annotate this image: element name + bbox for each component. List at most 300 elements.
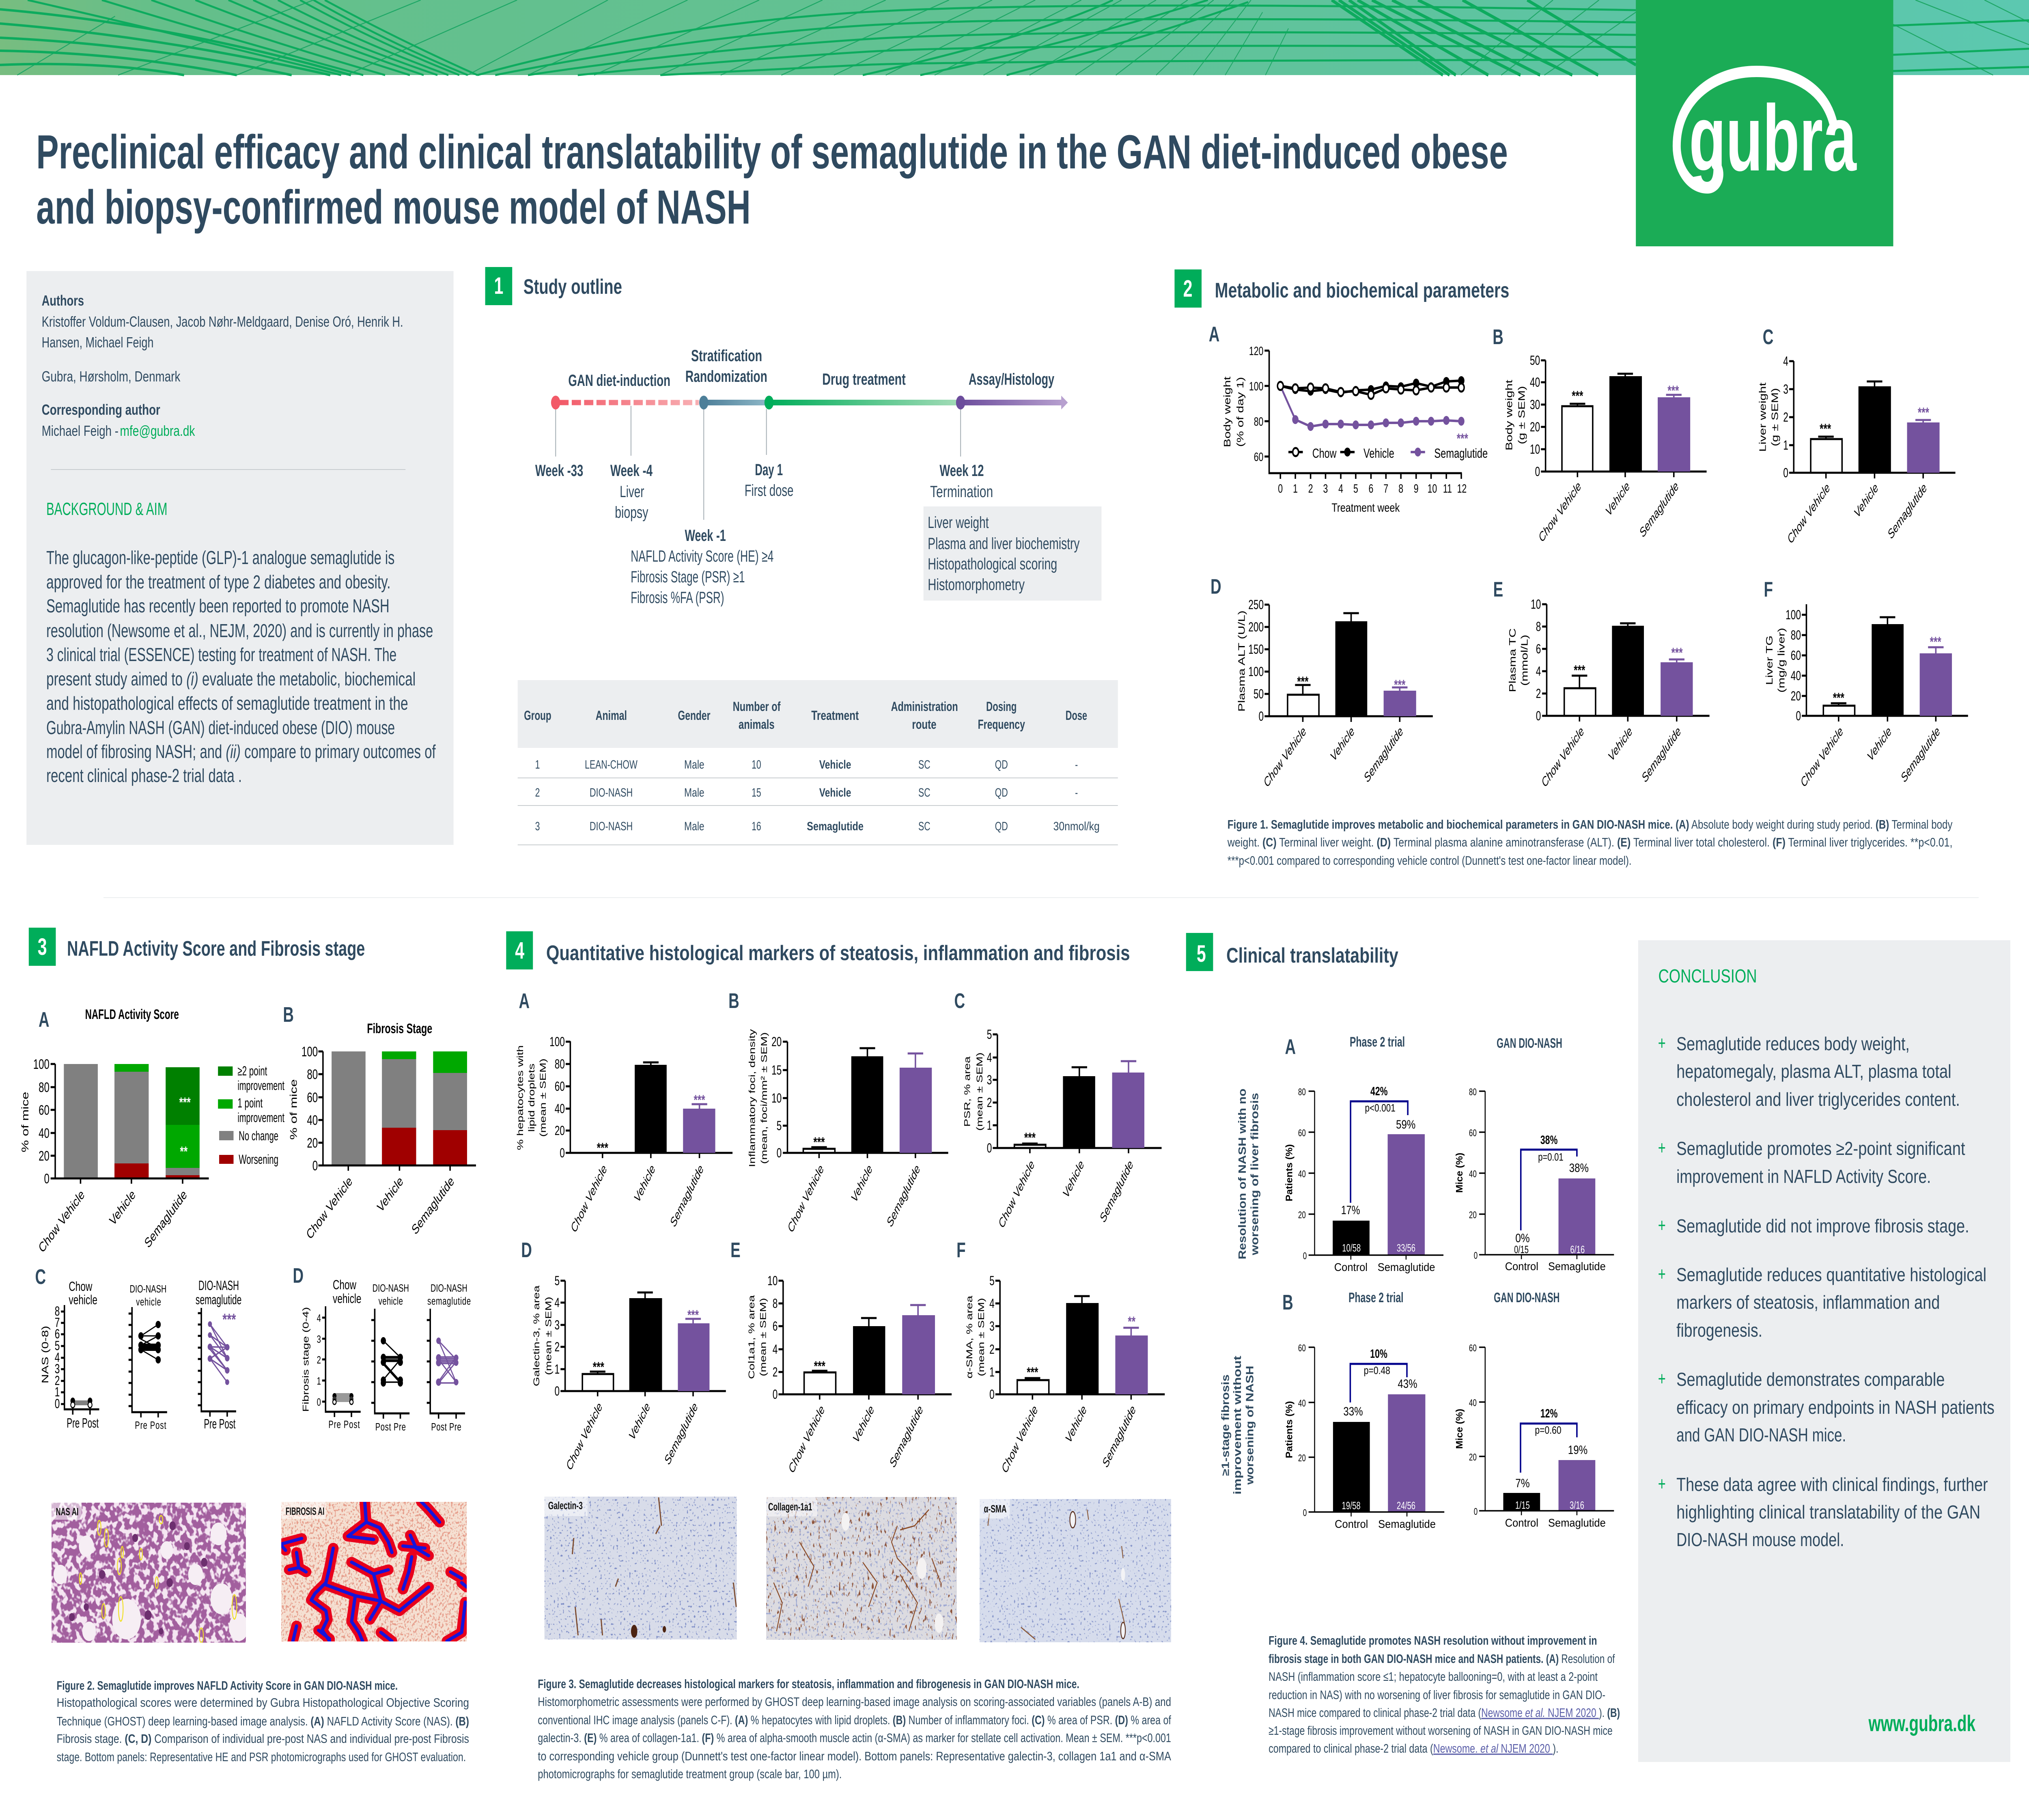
chart E: plasma TC bars: E: [1493, 577, 1503, 601]
chart C: liver weight bars: 1: [1783, 438, 1788, 452]
chart E: plasma TC bars: Semaglutide: [1639, 724, 1683, 785]
timeline: First dose: [745, 482, 793, 500]
chart A: NAFLD activity score stacked bars: NAFLD Activity Score: [85, 1007, 179, 1022]
badge 5: [1186, 933, 1213, 971]
conclusion bullets: +: [1658, 1264, 1666, 1284]
chart E: Col1a1: 6: [773, 1319, 778, 1333]
study design table: [518, 680, 1118, 845]
NAS DIO-NASH semaglutide: DIO-NASH: [198, 1278, 239, 1293]
fibrosis chow vehicle: Pre Post: [328, 1419, 360, 1430]
timeline: Week -4: [610, 462, 653, 480]
micrograph: fibrosis AI: [281, 1502, 467, 1641]
study design table: SC: [918, 819, 930, 833]
chart A left: phase 2 trial resolution: Patients (%): [1284, 1144, 1294, 1201]
NAS chow vehicle: 4: [55, 1350, 60, 1365]
figure 4 caption: ≥1-stage fibrosis improvement without worsening of NASH in GAN DIO-NASH mice: [1269, 1723, 1613, 1738]
badge 4: [506, 931, 533, 969]
chart F: liver TG bars: 0: [1796, 709, 1801, 723]
timeline: Termination: [930, 483, 993, 501]
chart E: plasma TC bars: Plasma TC: [1507, 628, 1518, 692]
figure 2 caption: Figure 2. Semaglutide improves NAFLD Activity Score in GAN DIO-NASH mice.: [57, 1678, 398, 1693]
chart C: paired NAS plots: [35, 1265, 241, 1432]
chart B: body weight bars: 20: [1530, 420, 1540, 434]
background paragraph: approved for the treatment of type 2 diabetes and obesity.: [46, 572, 390, 592]
assay list box: Liver weight: [928, 514, 989, 532]
chart A: hepatocytes with lipid droplets: 100: [549, 1034, 565, 1049]
chart D: plasma ALT bars: Vehicle: [1328, 724, 1357, 764]
chart B: inflammatory foci: 20: [771, 1034, 782, 1049]
chart E: Col1a1: 8: [773, 1296, 778, 1311]
chart D: plasma ALT bars: D: [1211, 575, 1221, 599]
authors block: Hansen, Michael Feigh: [42, 334, 153, 351]
chart B right: GAN DIO-NASH fibrosis: Semaglutide: [1548, 1517, 1606, 1529]
chart D: plasma ALT bars: 100: [1248, 664, 1264, 679]
chart A: NAFLD activity score stacked bars: A: [39, 1008, 50, 1032]
chart E: Col1a1: 0: [773, 1387, 778, 1402]
figure 4 caption: reduction in NAS) with no worsening of liver fibrosis for semaglutide in GAN DIO-: [1269, 1688, 1605, 1702]
study design table: -: [1075, 785, 1078, 799]
chart B: fibrosis stage stacked bars: 80: [307, 1067, 318, 1082]
chart A: hepatocytes with lipid droplets: ***: [597, 1140, 608, 1156]
micrograph: NAS AI: NAS AI: [56, 1506, 78, 1518]
chart B: fibrosis stage stacked bars: % of mice: [288, 1079, 299, 1140]
chart B left: phase 2 trial fibrosis: Semaglutide: [1378, 1518, 1436, 1531]
chart A: NAFLD activity score stacked bars: 40: [39, 1126, 50, 1141]
figure 2 caption: [57, 1678, 469, 1764]
badge 1: 1: [494, 273, 503, 299]
chart A: body weight over time: 8: [1398, 481, 1403, 495]
conclusion bullets: These data agree with clinical findings, further: [1676, 1475, 1988, 1495]
micrograph: NAS AI: [52, 1503, 248, 1643]
chart C: PSR area: PSR, % area: [962, 1056, 972, 1127]
authors block: [42, 293, 403, 439]
study design table: Semaglutide: [807, 819, 864, 833]
chart B right: GAN DIO-NASH fibrosis: 20: [1469, 1452, 1477, 1463]
chart A: body weight over time: 4: [1338, 481, 1343, 495]
fibrosis DIO-NASH vehicle: vehicle: [379, 1295, 403, 1307]
chart A: hepatocytes with lipid droplets: 60: [555, 1079, 565, 1094]
figure 2 caption: stage. Bottom panels: Representative HE and PSR photomicrographs used for GHOST evaluation.: [57, 1750, 466, 1764]
background paragraph: [46, 548, 436, 786]
chart B: body weight bars: 30: [1530, 397, 1540, 412]
figure 2 caption: Fibrosis stage. (C, D) Comparison of individual pre-post NAS and individual pre-post Fibrosis: [57, 1732, 469, 1746]
badge 2: 2: [1183, 276, 1192, 302]
figure 1 caption: [1227, 817, 1953, 868]
chart E: plasma TC bars: 2: [1536, 686, 1541, 701]
chart C: PSR area: 3: [987, 1073, 992, 1087]
chart A: body weight over time: 2: [1308, 481, 1313, 495]
chart C: liver weight bars: 2: [1783, 410, 1788, 424]
chart A: body weight over time: (% of day 1): [1235, 377, 1245, 447]
chart C: PSR area: Semaglutide: [1098, 1157, 1135, 1225]
timeline: Assay/Histology: [969, 370, 1055, 388]
chart D: galectin-3: ***: [593, 1359, 604, 1375]
legend: [218, 1064, 284, 1167]
fibrosis chow vehicle: 1: [317, 1375, 321, 1387]
chart C: liver weight bars: 0: [1783, 465, 1788, 480]
chart A right: GAN DIO-NASH resolution: 0%: [1515, 1231, 1530, 1245]
conclusion bullets: cholesterol and liver triglycerides content.: [1676, 1090, 1960, 1110]
study design table: LEAN-CHOW: [585, 757, 638, 771]
chart A: NAFLD activity score stacked bars: Chow Vehicle: [37, 1187, 87, 1256]
chart C: PSR area: ***: [1024, 1130, 1036, 1146]
section 3: NAFLD activity score and fibrosis stage: [20, 928, 476, 1764]
chart B: fibrosis stage stacked bars: Vehicle: [375, 1173, 405, 1215]
chart B: body weight bars: 10: [1530, 442, 1540, 457]
assay list box: Plasma and liver biochemistry: [928, 535, 1080, 553]
fibrosis chow vehicle: Chow: [333, 1277, 357, 1292]
conclusion bullets: +: [1658, 1138, 1666, 1158]
chart A left: phase 2 trial resolution: p<0.001: [1365, 1102, 1396, 1114]
conclusion bullets: and GAN DIO-NASH mice.: [1676, 1425, 1846, 1445]
chart B right: GAN DIO-NASH fibrosis: Control: [1505, 1517, 1538, 1529]
chart B left: phase 2 trial fibrosis: 24/56: [1397, 1500, 1415, 1512]
chart A: hepatocytes with lipid droplets: Chow Vehicle: [569, 1162, 609, 1235]
chart B: body weight bars: ***: [1572, 388, 1583, 404]
timeline: Week -1: [685, 527, 726, 545]
chart D: galectin-3: [521, 1238, 726, 1473]
study design table: Dosing: [986, 699, 1017, 714]
study design table: SC: [918, 757, 930, 771]
chart B: inflammatory foci: Semaglutide: [885, 1162, 922, 1230]
chart B left: phase 2 trial fibrosis: p=0.48: [1364, 1365, 1390, 1376]
chart A: body weight over time: 0: [1278, 481, 1283, 495]
chart C: PSR area: 1: [987, 1118, 992, 1133]
legend: Worsening: [239, 1152, 278, 1167]
NAS chow vehicle: vehicle: [69, 1292, 97, 1307]
background paragraph: Semaglutide has recently been reported to promote NASH: [46, 596, 390, 616]
chart D: galectin-3: D: [521, 1238, 532, 1262]
figure 3 caption: Figure 3. Semaglutide decreases histological markers for steatosis, inflammation and fibrogenesis in GAN DIO-NASH mice.: [538, 1677, 1079, 1691]
chart C: liver weight bars: (g ± SEM): [1770, 388, 1780, 446]
micrograph: collagen-1a1: Collagen-1a1: [768, 1501, 812, 1513]
timeline: Stratification: [691, 347, 762, 365]
chart D: plasma ALT bars: 150: [1248, 642, 1264, 657]
chart B: fibrosis stage stacked bars: 100: [302, 1044, 318, 1060]
study design table: Frequency: [978, 717, 1025, 732]
chart A right: GAN DIO-NASH resolution: 40: [1469, 1169, 1477, 1180]
figure 3 caption: galectin-3. (E) % area of collagen-1a1. (F) % area of alpha-smooth muscle actin (α-SMA) as marker for stellate cell activation. Mean ± SEM. ***p<0.001: [538, 1731, 1171, 1745]
chart A left: phase 2 trial resolution: 60: [1298, 1128, 1306, 1139]
assay list box: Histomorphometry: [928, 576, 1025, 594]
chart B left: phase 2 trial fibrosis: 0: [1303, 1508, 1307, 1518]
chart E: Col1a1: Vehicle: [851, 1402, 876, 1445]
chart D: paired fibrosis plots: [293, 1264, 471, 1433]
chart B: inflammatory foci: ***: [813, 1135, 825, 1150]
study design table: 15: [752, 785, 761, 799]
chart B: body weight bars: Body weight: [1504, 380, 1514, 450]
chart B: inflammatory foci: 15: [771, 1063, 782, 1077]
chart A right: GAN DIO-NASH resolution: p=0.01: [1538, 1151, 1564, 1163]
conclusion bullets: DIO-NASH mouse model.: [1676, 1530, 1844, 1550]
authors block: Authors: [42, 293, 84, 309]
timeline: Liver: [620, 483, 644, 501]
study design table: Animal: [596, 708, 627, 723]
chart B: body weight bars: (g ± SEM): [1516, 386, 1527, 444]
chart B right: GAN DIO-NASH fibrosis: 3/16: [1570, 1499, 1584, 1511]
chart A: body weight over time: A: [1209, 322, 1219, 346]
section 1: study outline: [485, 267, 1118, 845]
chart F: liver TG bars: Vehicle: [1865, 724, 1893, 764]
row label A: worsening of liver fibrosis: [1249, 1093, 1260, 1256]
row label A: Resolution of NASH with no: [1236, 1088, 1248, 1260]
chart F: liver TG bars: Semaglutide: [1899, 724, 1942, 785]
NAS DIO-NASH semaglutide: ***: [222, 1311, 236, 1329]
chart B: body weight bars: Vehicle: [1603, 479, 1632, 519]
chart B left: phase 2 trial fibrosis: 33%: [1343, 1404, 1363, 1418]
chart D: galectin-3: (mean ± SEM): [543, 1297, 554, 1375]
chart A left: phase 2 trial resolution: 17%: [1341, 1203, 1360, 1217]
chart B: fibrosis stage stacked bars: 40: [307, 1113, 318, 1128]
study design table: Number of: [733, 699, 781, 714]
chart A right: GAN DIO-NASH resolution: Semaglutide: [1548, 1260, 1606, 1273]
figure 3 caption: to corresponding vehicle group (Dunnett's test one-factor linear model). Bottom panels: Representative galectin-3, collagen 1a1 and α-SMA: [538, 1749, 1171, 1763]
chart A: hepatocytes with lipid droplets: 40: [555, 1101, 565, 1116]
chart A: body weight over time: Treatment week: [1331, 500, 1400, 515]
chart D: plasma ALT bars: 0: [1258, 709, 1264, 724]
figure 1 caption: Figure 1. Semaglutide improves metabolic and biochemical parameters in GAN DIO-NASH mice. (A) Absolute body weight during study period. (B) Terminal body: [1228, 817, 1953, 831]
chart C: liver weight bars: Liver weight: [1758, 382, 1768, 452]
micrograph: alpha-SMA: α-SMA: [984, 1503, 1007, 1515]
website: www.gubra.dk: [1868, 1711, 1976, 1736]
figure 4 caption: fibrosis stage in both GAN DIO-NASH mice and NASH patients. (A) Resolution of: [1269, 1652, 1615, 1666]
chart A: body weight over time: 5: [1353, 481, 1358, 495]
heading: clinical translatability: Clinical translatability: [1226, 943, 1398, 967]
chart F: liver TG bars: 80: [1791, 628, 1801, 642]
NAS chow vehicle: NAS (0-8): [40, 1326, 50, 1383]
chart C: PSR area: 5: [987, 1027, 992, 1042]
chart C: paired NAS plots: C: [35, 1265, 46, 1289]
chart D: plasma ALT bars: Semaglutide: [1362, 724, 1405, 785]
chart B right: GAN DIO-NASH fibrosis: 19%: [1568, 1443, 1587, 1457]
chart A right: GAN DIO-NASH resolution: 38%: [1569, 1161, 1589, 1175]
chart F: alpha-SMA: α-SMA, % area: [965, 1295, 974, 1378]
panel: conclusion: [1638, 940, 2010, 1762]
chart D: plasma ALT bars: [1211, 575, 1433, 790]
chart C: liver weight bars: ***: [1918, 405, 1929, 420]
chart A left: phase 2 trial resolution: [1284, 1034, 1443, 1274]
chart A left: phase 2 trial resolution: Control: [1334, 1261, 1368, 1274]
row label A: A: [1285, 1035, 1296, 1059]
study design table: Gender: [678, 708, 711, 723]
chart A left: phase 2 trial resolution: Semaglutide: [1378, 1261, 1435, 1274]
chart A left: phase 2 trial resolution: 80: [1298, 1087, 1306, 1098]
conclusion bullets: +: [1658, 1369, 1666, 1389]
logo panel: [1636, 0, 1893, 246]
chart E: plasma TC bars: ***: [1671, 645, 1683, 661]
conclusion bullets: hepatomegaly, plasma ALT, plasma total: [1676, 1062, 1951, 1082]
chart D: galectin-3: 3: [555, 1318, 560, 1332]
row label B: worsening of NASH: [1244, 1366, 1256, 1485]
chart E: plasma TC bars: Vehicle: [1606, 724, 1635, 764]
NAS chow vehicle: Pre Post: [67, 1416, 99, 1431]
chart C: PSR area: (mean ± SEM): [974, 1052, 984, 1131]
background paragraph: 3 clinical trial (ESSENCE) testing for treatment of NASH. The: [46, 645, 396, 665]
background paragraph: resolution (Newsome et al., NEJM, 2020) and is currently in phase: [46, 621, 433, 641]
chart F: alpha-SMA: 1: [989, 1365, 995, 1379]
chart B: inflammatory foci: Inflammatory foci, density: [747, 1029, 757, 1167]
chart A left: phase 2 trial resolution: 0: [1303, 1251, 1307, 1262]
conclusion bullets: highlighting clinical translatability of the GAN: [1676, 1502, 1980, 1523]
NAS DIO-NASH semaglutide: [196, 1278, 241, 1432]
chart F: liver TG bars: 100: [1786, 607, 1801, 622]
badge 3: 3: [38, 934, 47, 960]
chart A: hepatocytes with lipid droplets: % hepatocytes with: [515, 1045, 525, 1150]
study design table: Male: [684, 757, 704, 771]
chart A: hepatocytes with lipid droplets: Semaglutide: [668, 1162, 706, 1230]
chart F: alpha-SMA: F: [956, 1238, 966, 1262]
legend: 1 point: [237, 1096, 263, 1110]
row label A: [1236, 1035, 1296, 1260]
chart B: fibrosis stage stacked bars: [283, 1003, 476, 1243]
chart A: hepatocytes with lipid droplets: ***: [694, 1092, 705, 1108]
legend: No change: [239, 1129, 278, 1143]
chart C: liver weight bars: 4: [1783, 354, 1788, 368]
conclusion bullets: +: [1658, 1474, 1666, 1494]
timeline: Randomization: [685, 368, 767, 386]
timeline: NAFLD Activity Score (HE) ≥4: [631, 547, 773, 565]
chart B: inflammatory foci: 10: [771, 1091, 782, 1105]
row label B: ≥1-stage fibrosis: [1219, 1374, 1231, 1476]
chart F: alpha-SMA: (mean ± SEM): [976, 1298, 986, 1376]
chart A: NAFLD activity score stacked bars: [20, 1007, 284, 1256]
figure 1 caption: weight. (C) Terminal liver weight. (D) Terminal plasma alanine aminotransferase (ALT). (E) Terminal liver total cholesterol. (F) Terminal liver triglycerides. **p<0.01,: [1227, 835, 1952, 849]
chart A right: GAN DIO-NASH resolution: GAN DIO-NASH: [1497, 1036, 1562, 1051]
section 5: clinical translatability: [1186, 933, 1620, 1755]
timeline: Drug treatment: [822, 370, 906, 388]
chart F: alpha-SMA: **: [1128, 1314, 1136, 1329]
chart A: hepatocytes with lipid droplets: 20: [555, 1123, 565, 1138]
chart F: alpha-SMA: 0: [989, 1387, 995, 1402]
authors block: Michael Feigh -: [42, 423, 118, 439]
NAS chow vehicle: 0: [55, 1396, 60, 1411]
chart A right: GAN DIO-NASH resolution: Control: [1505, 1260, 1538, 1273]
chart F: alpha-SMA: 5: [989, 1273, 995, 1288]
chart B left: phase 2 trial fibrosis: 60: [1298, 1343, 1306, 1354]
chart E: Col1a1: 4: [773, 1342, 778, 1357]
authors block: mfe@gubra.dk: [120, 423, 195, 439]
study design table: 30nmol/kg: [1053, 819, 1100, 833]
chart B: fibrosis stage stacked bars: 60: [307, 1090, 318, 1105]
fibrosis DIO-NASH semaglutide: DIO-NASH: [431, 1282, 467, 1294]
chart A: NAFLD activity score stacked bars: 80: [39, 1080, 50, 1095]
legend: [1288, 446, 1488, 461]
chart A: body weight over time: 1: [1293, 481, 1298, 495]
chart F: alpha-SMA: 4: [989, 1296, 995, 1311]
legend: Chow: [1312, 446, 1337, 461]
chart A left: phase 2 trial resolution: 59%: [1396, 1117, 1415, 1131]
NAS chow vehicle: 5: [55, 1338, 60, 1353]
chart D: plasma ALT bars: 50: [1254, 687, 1264, 701]
chart A right: GAN DIO-NASH resolution: 0/15: [1514, 1244, 1529, 1256]
authors block: Gubra, Hørsholm, Denmark: [42, 368, 181, 385]
figure 4 caption: Figure 4. Semaglutide promotes NASH resolution without improvement in: [1269, 1633, 1597, 1648]
chart D: galectin-3: Semaglutide: [662, 1400, 700, 1467]
NAS DIO-NASH vehicle: DIO-NASH: [130, 1283, 166, 1295]
fibrosis chow vehicle: 4: [317, 1312, 321, 1324]
chart F: alpha-SMA: Vehicle: [1063, 1402, 1089, 1445]
study design table: 1: [535, 757, 540, 771]
panel: authors and background: [26, 271, 454, 845]
fibrosis DIO-NASH semaglutide: [427, 1282, 471, 1433]
chart A: body weight over time: 10: [1428, 481, 1437, 495]
conclusion bullets: improvement in NAFLD Activity Score.: [1676, 1167, 1931, 1187]
authors block: Corresponding author: [42, 402, 160, 418]
chart B: body weight bars: B: [1493, 325, 1503, 349]
chart B right: GAN DIO-NASH fibrosis: 7%: [1515, 1476, 1530, 1490]
figure 4 caption: NASH mice compared to clinical phase-2 trial data ( Newsome et al. NJEM 2020 ). (B): [1269, 1706, 1620, 1720]
chart A: body weight over time: 12: [1457, 481, 1467, 495]
study design table: Group: [524, 708, 551, 723]
NAS chow vehicle: Chow: [69, 1279, 93, 1294]
chart C: PSR area: C: [954, 989, 965, 1013]
chart D: plasma ALT bars: 200: [1248, 620, 1264, 634]
chart F: liver TG bars: [1764, 577, 1968, 790]
chart C: liver weight bars: 3: [1783, 382, 1788, 396]
chart A left: phase 2 trial resolution: Phase 2 trial: [1350, 1034, 1405, 1050]
chart F: liver TG bars: F: [1764, 577, 1773, 601]
chart A left: phase 2 trial resolution: 40: [1298, 1169, 1306, 1180]
chart A right: GAN DIO-NASH resolution: 6/16: [1570, 1244, 1585, 1256]
study design table: Treatment: [811, 708, 859, 723]
micrograph: alpha-SMA: [980, 1499, 1171, 1642]
conclusion bullets: [1658, 1033, 1995, 1550]
study design table: Administration: [891, 699, 958, 714]
chart B left: phase 2 trial fibrosis: Phase 2 trial: [1348, 1290, 1404, 1305]
study design table: DIO-NASH: [590, 785, 633, 799]
chart B: body weight bars: 0: [1535, 464, 1540, 479]
timeline: biopsy: [615, 504, 648, 521]
NAS chow vehicle: 6: [55, 1327, 60, 1341]
study design table: Vehicle: [819, 757, 851, 771]
legend: Vehicle: [1363, 446, 1394, 461]
chart D: galectin-3: 0: [555, 1384, 560, 1398]
section 4: quantitative histological markers: [506, 931, 1171, 1781]
chart D: galectin-3: Galectin-3, % area: [531, 1285, 541, 1386]
chart A: hepatocytes with lipid droplets: 0: [560, 1146, 565, 1160]
NAS DIO-NASH vehicle: Pre Post: [135, 1419, 166, 1431]
NAS DIO-NASH vehicle: vehicle: [136, 1296, 161, 1308]
chart A left: phase 2 trial resolution: 10/58: [1342, 1242, 1361, 1254]
chart B right: GAN DIO-NASH fibrosis: 60: [1469, 1343, 1477, 1354]
figure 2 caption: Technique (GHOST) deep learning-based image analysis. (A) NAFLD Activity Score (NAS). (B): [57, 1714, 469, 1728]
conclusion bullets: Semaglutide reduces quantitative histological: [1676, 1265, 1986, 1285]
timeline: Fibrosis Stage (PSR) ≥1: [631, 568, 745, 586]
chart D: galectin-3: 2: [555, 1340, 560, 1354]
chart C: liver weight bars: [1758, 325, 1956, 546]
chart A: body weight over time: 60: [1254, 450, 1263, 464]
chart A: body weight over time: 80: [1254, 414, 1263, 429]
study design table: animals: [739, 717, 775, 732]
chart C: PSR area: 4: [987, 1050, 992, 1065]
background paragraph: model of fibrosing NASH; and (ii) compare to primary outcomes of: [46, 742, 436, 762]
chart E: plasma TC bars: 6: [1536, 642, 1541, 656]
NAS chow vehicle: 2: [55, 1373, 60, 1388]
badge 2: [1174, 269, 1202, 308]
chart C: PSR area: 0: [987, 1141, 992, 1155]
figure 4 caption: [1269, 1633, 1620, 1755]
chart E: plasma TC bars: 0: [1536, 709, 1541, 723]
NAS DIO-NASH semaglutide: semaglutide: [196, 1292, 241, 1307]
chart B: inflammatory foci: 5: [777, 1118, 782, 1133]
fibrosis chow vehicle: [301, 1277, 362, 1430]
chart D: plasma ALT bars: ***: [1394, 677, 1406, 693]
chart B: fibrosis stage stacked bars: Fibrosis Stage: [367, 1021, 432, 1036]
chart A: body weight over time: 100: [1249, 379, 1263, 393]
chart D: galectin-3: Chow Vehicle: [564, 1400, 604, 1473]
background heading: BACKGROUND & AIM: [46, 499, 167, 519]
chart D: galectin-3: 5: [555, 1273, 560, 1288]
